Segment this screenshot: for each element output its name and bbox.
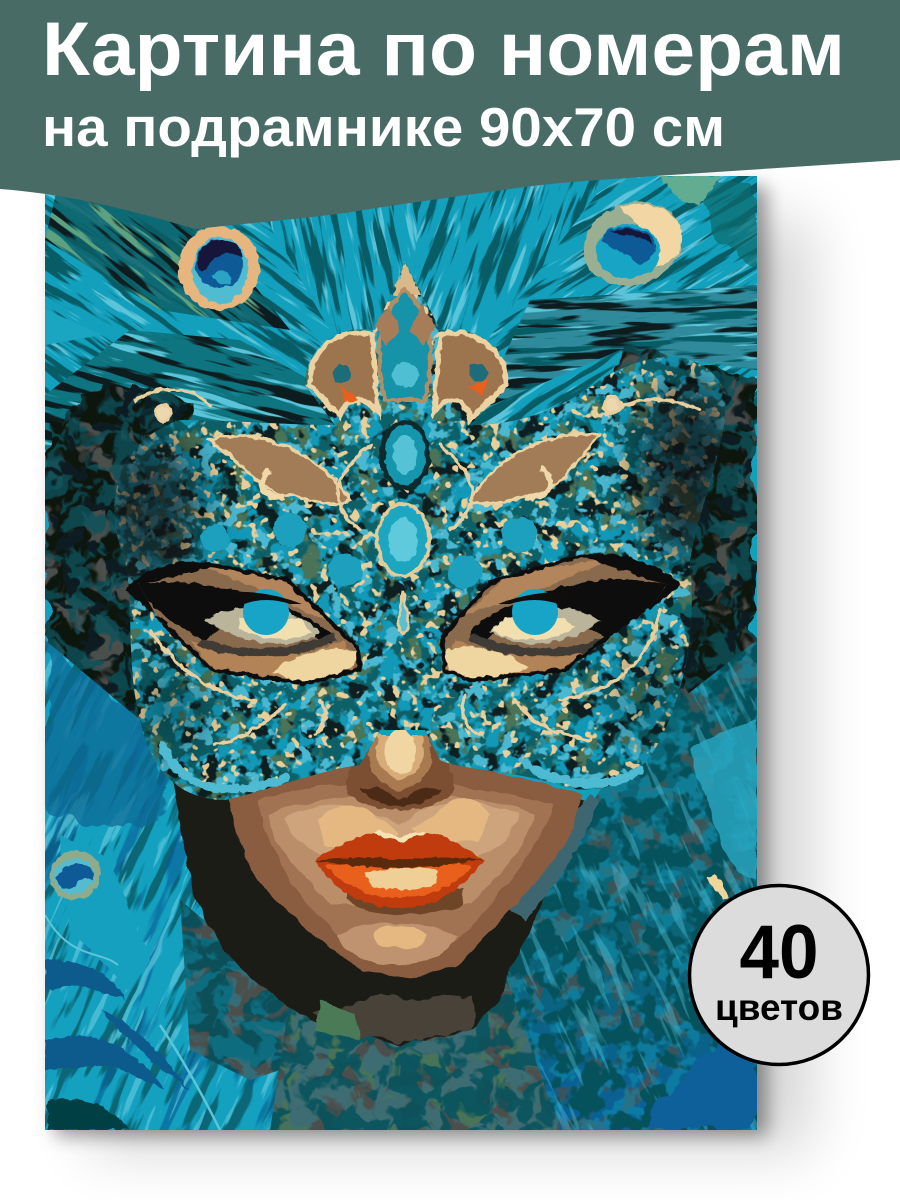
- subtitle: на подрамнике 90х70 см: [42, 96, 725, 158]
- neck and lower centre: [172, 780, 600, 1140]
- lower left dark teal patch: [180, 900, 289, 1080]
- top feathers: [45, 176, 757, 446]
- feather spine light triangle: [45, 314, 102, 345]
- dark feather band left: [45, 330, 333, 469]
- centre jewels: [201, 422, 538, 634]
- painting: peacock feather masked woman: [45, 176, 757, 1130]
- face skin: [228, 755, 582, 978]
- gold filigree on mask: [135, 389, 700, 745]
- dark hair sides: [45, 346, 757, 720]
- nose: [346, 730, 454, 810]
- left eye: [126, 561, 363, 686]
- gold brown scrolls: [210, 434, 600, 504]
- small peacock eye lower left: [50, 850, 101, 900]
- header band: [0, 0, 900, 229]
- lower left feathers: [45, 640, 280, 1130]
- crown ornament: [310, 262, 506, 420]
- mask body: [100, 260, 740, 810]
- canvas shadow: [55, 186, 810, 1150]
- badge label: цветов: [715, 987, 843, 1028]
- title: Картина по номерам: [42, 7, 845, 92]
- lower mask scalloped edges: [162, 745, 640, 789]
- dark feather band top left: [45, 196, 290, 330]
- lips: [315, 832, 483, 908]
- lower right feathers: [506, 640, 757, 1130]
- peacock eye left: [178, 226, 260, 310]
- badge: 40 colours: [690, 886, 868, 1064]
- peacock eye right: [584, 200, 682, 287]
- dark feather band right: [490, 285, 757, 406]
- right eye: [436, 550, 680, 690]
- badge number: 40: [740, 910, 818, 995]
- mask dark wing shading: [100, 380, 740, 760]
